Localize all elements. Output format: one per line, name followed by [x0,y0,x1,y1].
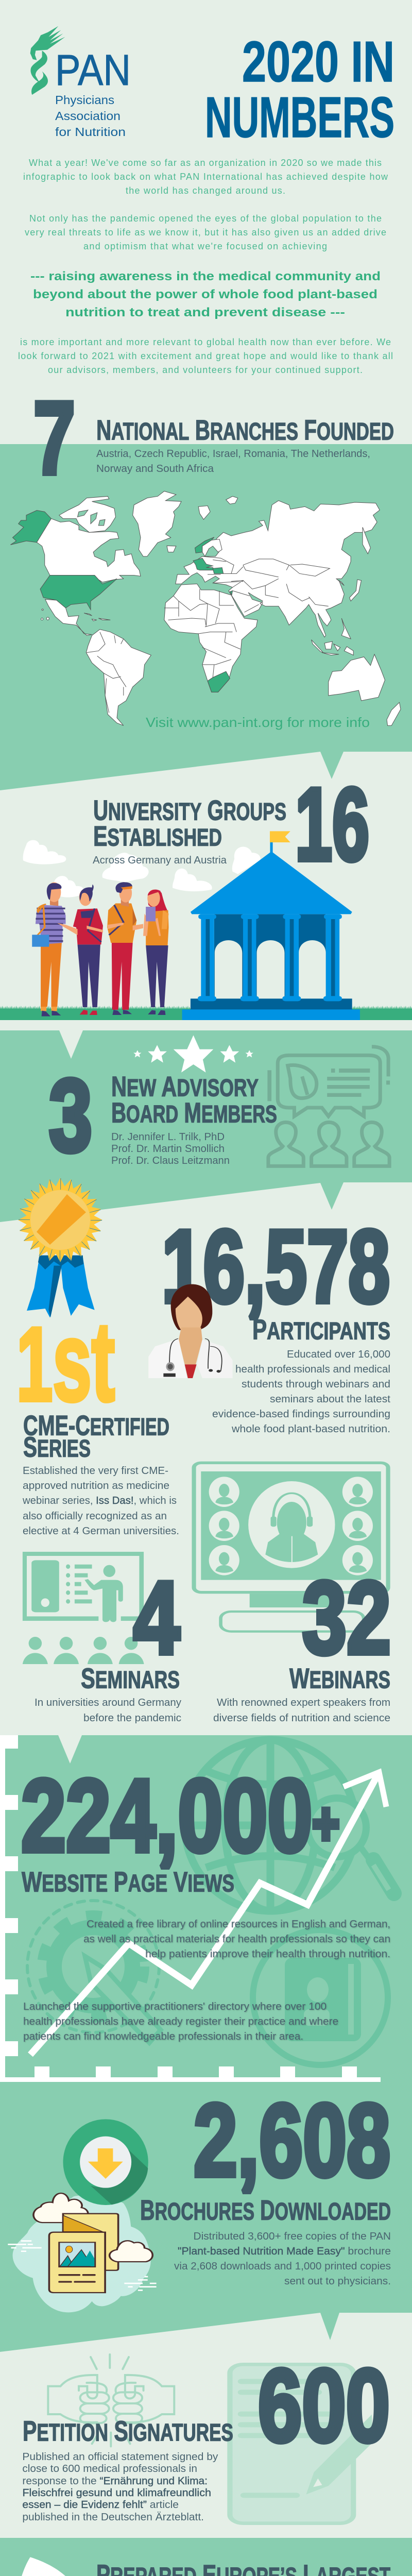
webinars text: diverse fields of nutrition and science [213,1713,390,1724]
member names: Prof. Dr. Claus Leitzmann [111,1155,230,1166]
icon: globe [185,1740,356,1911]
illustration: doctor [148,1284,233,1378]
heading: NEW ADVISORY [111,1071,259,1103]
member names [111,1131,230,1166]
brochures text: via 2,608 downloads and 1,000 printed copies [174,2261,391,2272]
student with orange jacket [107,882,143,1015]
icon: leaf [18,2557,79,2576]
intro text: and optimism that what we're focused on achieving [83,241,327,251]
arrow head [344,1772,386,1807]
number 4: 4 [133,1561,180,1675]
ribbon tails [27,1256,95,1317]
logo name [55,93,126,139]
heading: seminars: SEMINARS [81,1662,180,1694]
cloud lower [110,2241,152,2262]
number 16: 16 [295,767,369,882]
participants text: health professionals and medical [235,1364,390,1375]
webinars text [213,1697,390,1724]
icon: webinar monitor [194,1463,388,1632]
icon: book circle [253,1930,388,2065]
white chart axis [0,1735,381,2082]
closing intro text: look forward to 2021 with excitement and great hope and would like to thank all [18,351,393,361]
logo name: Association [55,109,121,123]
panel: advisory board [0,1030,412,1222]
world map [10,491,401,725]
panel: header [18,26,394,375]
illustration: four students [32,882,169,1016]
intro text: Not only has the pandemic opened the eyes of the global population to the [29,213,382,224]
grass [0,1006,412,1020]
participants text: students through webinars and [242,1379,390,1390]
number 224,000+: 224,000 [21,1758,393,1873]
closing intro text: is more important and more relevant to global health now than ever before. We [20,337,391,347]
participants text [212,1349,390,1435]
directory text [23,2001,338,2042]
more info link: Visit www.pan-int.org for more info [146,715,370,730]
growth arrow [30,1772,379,2055]
heading: NATIONAL BRANCHES FOUNDED [96,414,394,446]
section band [0,1735,412,2352]
section band [0,444,412,790]
panel: petition [22,2348,390,2523]
mission statement: nutrition to treat and prevent disease --- [65,306,345,319]
member names: Prof. Dr. Martin Smollich [111,1143,225,1155]
icon: magnifier [307,1798,394,1893]
seminars text: before the pandemic [83,1713,181,1724]
icon: stars [133,1035,253,1073]
heading [111,1071,277,1128]
icon: signed document [230,2364,373,2523]
heading: BOARD MEMBERS [111,1096,277,1128]
cloud upper [33,2193,88,2223]
section band [0,1030,412,1222]
clouds [23,840,261,897]
heading: CME series: CME-CERTIFIED [23,1410,169,1442]
CME text: also officially recognized as an [23,1511,167,1522]
participants text: evidence-based findings surrounding [212,1409,390,1420]
CME text [22,1465,179,1537]
subtitle: Across Germany and Austria [93,855,227,866]
webinars text: With renowned expert speakers from [217,1697,390,1708]
section band [0,2538,412,2576]
participants text: seminars about the latest [270,1394,390,1405]
panel: participants and CME series [16,1178,390,1537]
country list: Austria, Czech Republic, Israel, Romania, The Netherlands, [96,448,370,460]
heading: CME series [23,1410,169,1463]
panel: national branches [0,381,412,790]
country list: Norway and South Africa [96,463,214,474]
number 224,000+: + [312,1791,339,1857]
illustration: brochure with clouds [8,2119,157,2312]
participants text: Educated over 16,000 [287,1349,390,1360]
closing intro text: our advisors, members, and volunteers for your continued support. [48,365,363,375]
icon: rosette ribbon [18,1178,102,1317]
petition text: published in the Deutschen Ärzteblatt. [22,2512,204,2523]
mission statement [30,269,381,319]
panel: university groups [0,767,412,1020]
mission statement: --- raising awareness in the medical community and [30,269,381,283]
icon: download badge [63,2119,148,2205]
intro text: the world has changed around us. [126,185,285,196]
panel: seminars and webinars [23,1463,391,1724]
heading: CME series: SERIES [23,1431,91,1463]
title [205,30,394,149]
resources text: help patients improve their health through nutrition. [145,1948,390,1960]
petition text: essen – die Evidenz fehlt” article [22,2499,179,2511]
background icons [27,1740,394,2065]
heading: WEBSITE PAGE VIEWS [22,1866,234,1898]
number 3: 3 [49,1058,92,1173]
brochures text: Distributed 3,600+ free copies of the PAN [194,2231,391,2242]
webinar attendees [209,1477,373,1575]
rosette medal [18,1178,102,1262]
logo name: Physicians [55,93,114,107]
icon: university building [182,831,360,1020]
student with red shirt [57,885,103,1015]
logo: PAN [30,26,131,139]
number 1st: 1st [16,1299,115,1425]
brochures text [174,2231,391,2287]
icon: gear and pencil [27,1901,161,2043]
student with book [32,882,66,1016]
icon: fork and snake [30,26,65,95]
resources text [83,1919,390,1960]
resources text: Created a free library of online resources in English and German, [87,1919,390,1930]
heading: ESTABLISHED [93,820,222,852]
intro text [23,158,388,251]
heading [93,794,286,852]
directory text: health professionals have already register their practice and where [23,2016,338,2027]
intro text: What a year! We've come so far as an organization in 2020 so we made this [29,158,382,168]
seminars text: In universities around Germany [35,1697,181,1708]
icon: advisory bubble and people [267,1047,390,1166]
brochure front page [49,2232,105,2293]
heading: UNIVERSITY GROUPS [93,794,286,826]
brochure back page [63,2214,118,2270]
logo wordmark: PAN [55,46,131,94]
panel: conference [0,2538,412,2576]
participants text: whole food plant-based nutrition. [231,1423,390,1435]
resources text: as well as practical materials for health professionals so they can [83,1934,390,1945]
directory text: Launched the supportive practitioners' directory where over 100 [23,2001,327,2012]
brochures text: sent out to physicians. [284,2276,391,2287]
panel: brochures [8,2083,391,2312]
petition text: Published an official statement signed by [22,2451,218,2463]
logo name: for Nutrition [55,125,126,139]
brochure fold [63,2215,102,2232]
closing intro text [18,337,393,375]
student with tablet [143,890,169,1015]
heading: PETITION SIGNATURES [23,2415,233,2447]
member names: Dr. Jennifer L. Trilk, PhD [111,1131,225,1143]
CME text: elective at 4 German universities. [23,1526,179,1537]
number 7: 7 [33,381,75,496]
petition text: response to the “Ernährung und Klima: [22,2476,208,2487]
CME text: approved nutrition as medicine [23,1480,169,1492]
mission statement: beyond about the power of whole food plant-based [33,287,377,301]
seminars text [35,1697,181,1724]
petition text: close to 600 medical professionals in [22,2463,197,2475]
panel: website page views [0,1735,412,2352]
CME text: Established the very first CME- [23,1465,168,1477]
CME text: webinar series, Iss Das!, which is [22,1495,177,1506]
petition text [22,2451,218,2523]
brochures text: "Plant-based Nutrition Made Easy" brochure [178,2246,391,2257]
icon: fist bump [48,2354,174,2446]
intro text: very real threats to life as we know it, but it has also given us an added drive [25,227,386,238]
brochure picture [59,2242,95,2267]
icon: seminar presenter [23,1552,144,1664]
country list [96,448,370,474]
directory text: patients can find knowledgeable professionals in their area. [23,2031,303,2042]
petition text: Fleischfrei gesund und klimafreundlich [22,2487,211,2499]
intro text: infographic to look back on what PAN International has achieved despite how [23,172,388,182]
